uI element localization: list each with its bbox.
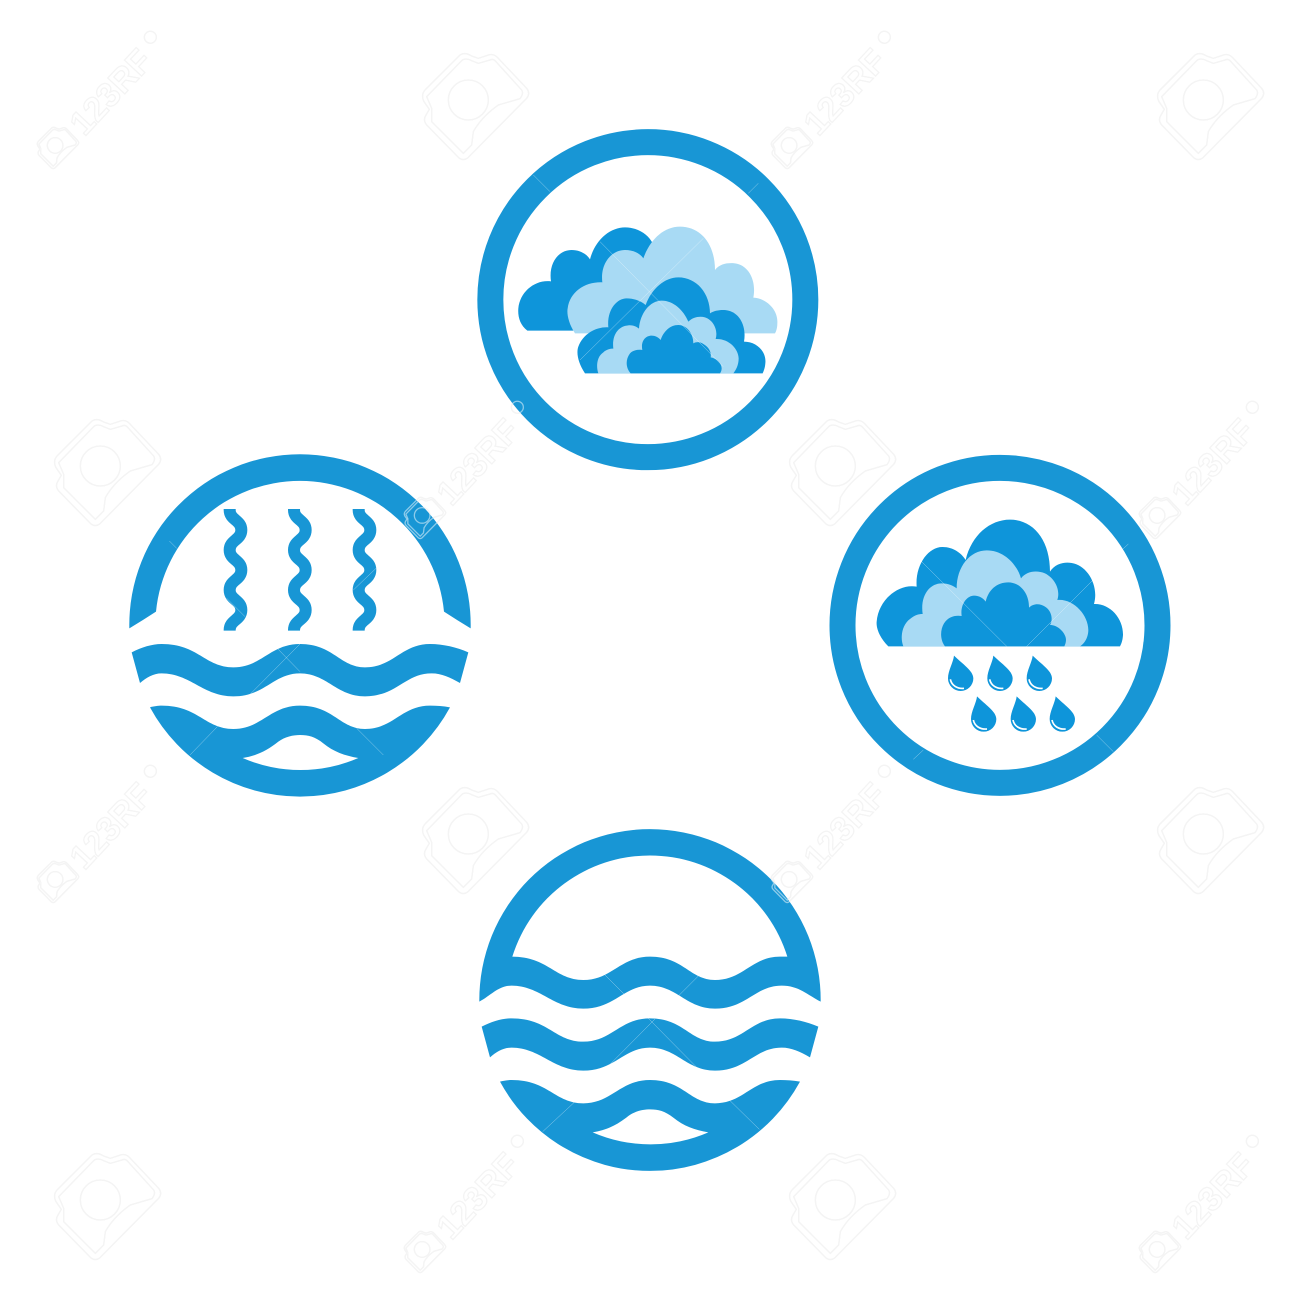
watermark: logo row 2 centre <box>404 396 542 539</box>
icon: sea waves (collection) <box>479 829 821 1171</box>
watermark: logo row 2 centre: 123RF <box>430 412 527 513</box>
watermark: camera row 4 right <box>790 1154 896 1259</box>
watermark: logo row 1 right: 123RF <box>797 42 894 143</box>
icon: evaporation <box>129 454 471 797</box>
watermark: camera row 2 left <box>55 420 161 525</box>
watermark: logo row 1 right <box>771 26 909 169</box>
watermark: logo row 3 left: 123RF <box>63 776 160 877</box>
vapour squiggles <box>224 509 376 631</box>
watermark: logo row 2 far right: 123RF <box>1165 412 1262 513</box>
back cloud light <box>567 227 777 333</box>
watermark: camera row 1 centre <box>423 54 529 159</box>
cloud front dark <box>941 582 1066 646</box>
watermark: logo row 1 left <box>37 26 175 169</box>
watermark: logo row 1 left: 123RF <box>63 42 160 143</box>
watermark: camera row 3 centre <box>423 788 529 893</box>
watermark: logo row 4 far right <box>1139 1130 1277 1273</box>
bottom water segment <box>500 1080 800 1171</box>
watermark: camera row 2 right <box>790 420 896 525</box>
watermark: logo row 2 far right <box>1139 396 1277 539</box>
back cloud dark <box>518 227 652 331</box>
watermark: camera row 4 left <box>55 1154 161 1259</box>
middle wave band <box>482 1018 818 1071</box>
front cloud smallest <box>627 325 722 373</box>
watermark: logo row 4 centre <box>404 1130 542 1273</box>
open ring arc <box>129 454 471 628</box>
watermark: logo row 4 centre: 123RF <box>430 1146 527 1247</box>
ring <box>490 142 805 457</box>
bottom water segment <box>150 706 450 797</box>
cloud middle light <box>902 550 1088 646</box>
ring <box>842 468 1157 783</box>
front cloud light <box>597 301 739 373</box>
front cloud dark <box>577 277 765 373</box>
watermark: logo row 3 right: 123RF <box>797 776 894 877</box>
cloud back dark <box>877 520 1123 646</box>
wave band <box>132 644 468 696</box>
icon: clouds (condensation) <box>490 142 805 457</box>
watermark: camera row 1 far right <box>1158 54 1264 159</box>
watermark: logo row 3 left <box>37 760 175 903</box>
watermark: camera row 3 far right <box>1158 788 1264 893</box>
ring with top wave <box>479 829 821 1009</box>
watermark: logo row 4 far right: 123RF <box>1165 1146 1262 1247</box>
watermark: logo row 3 right <box>771 760 909 903</box>
icon: rain cloud (precipitation) <box>842 468 1157 783</box>
raindrops <box>948 656 1075 732</box>
